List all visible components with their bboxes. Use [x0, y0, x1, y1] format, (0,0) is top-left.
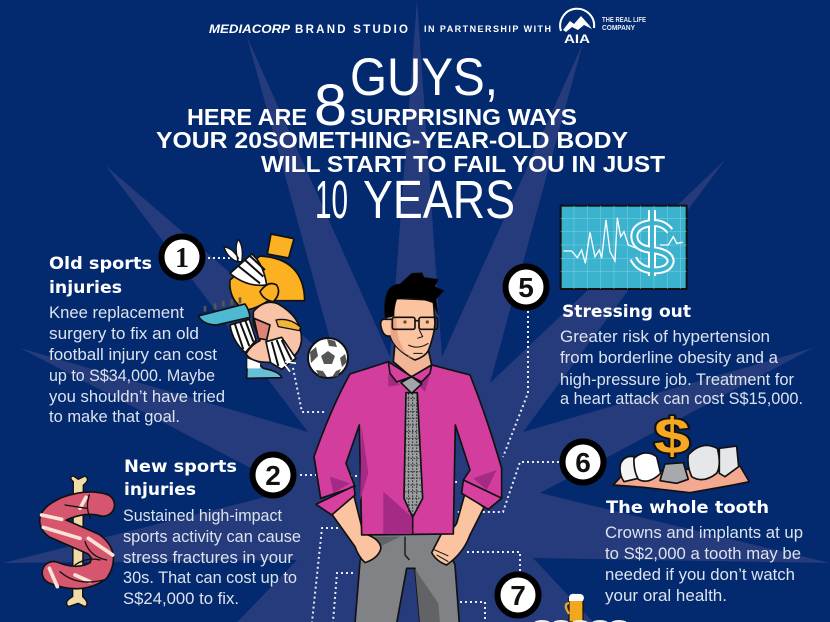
- panel: new sports injuries text: stress fractures in your: [123, 549, 294, 567]
- number badge 5: [506, 266, 546, 308]
- panel: old sports injuries text: Old sports: [49, 254, 152, 274]
- icon: heart monitor with dollar sign: [561, 206, 687, 289]
- icon: teeth with gold dollar: $: [654, 408, 690, 464]
- icon: row of bottle tops: [534, 620, 627, 622]
- number badge 6: [562, 442, 604, 482]
- number badge 2: 2: [265, 460, 281, 491]
- number badge 7: [498, 574, 538, 616]
- header logos: THE REAL LIFE: [602, 17, 646, 24]
- icon: AIA logo: [560, 9, 594, 46]
- title: YEARS: [363, 170, 515, 230]
- panel: stressing out text: Greater risk of hypertension: [560, 328, 770, 346]
- number badge 5: 5: [518, 272, 534, 303]
- header logos: COMPANY: [602, 25, 635, 32]
- panel: the whole tooth text: Crowns and implants at up: [605, 524, 803, 542]
- trousers: [355, 533, 459, 622]
- panel: old sports injuries text: football injury can cost: [49, 346, 217, 364]
- title: 10: [315, 170, 348, 230]
- number badge 1: 1: [175, 243, 189, 274]
- panel: old sports injuries text: injuries: [49, 278, 122, 298]
- panel: the whole tooth text: The whole tooth: [606, 498, 769, 518]
- shirt: [314, 362, 502, 535]
- panel: new sports injuries text: injuries: [124, 480, 196, 500]
- title: GUYS,: [350, 48, 498, 107]
- panel: new sports injuries text: 30s. That can cost up to: [123, 569, 297, 587]
- panel: old sports injuries text: Knee replacement: [49, 304, 184, 322]
- right forearm and hand: [432, 493, 484, 565]
- icon: knee with football boot: [198, 234, 305, 378]
- panel: old sports injuries text: [49, 254, 225, 426]
- panel: new sports injuries text: Sustained high-impact: [123, 507, 282, 525]
- glasses: [392, 317, 415, 329]
- shirt cuffs: [316, 486, 355, 515]
- title: [156, 48, 665, 230]
- number badge 6: 6: [575, 447, 591, 478]
- panel: stressing out text: from borderline obesity and a: [560, 349, 779, 367]
- number badge 7: 7: [510, 580, 526, 611]
- panel: new sports injuries text: S$24,000 to fix.: [123, 590, 239, 608]
- dotted connector lines: [208, 258, 559, 622]
- header logos: MEDIACORP: [209, 24, 290, 36]
- icon: football: [308, 338, 348, 378]
- number badge 2: [252, 454, 294, 496]
- icon: beer mug: [566, 594, 584, 622]
- illustration: man in pink shirt: [314, 273, 502, 622]
- panel: new sports injuries text: [123, 457, 301, 608]
- panel: stressing out text: [560, 302, 803, 408]
- title: YOUR 20SOMETHING-YEAR-OLD BODY: [156, 127, 628, 153]
- panel: stressing out text: high-pressure job. Treatment for: [560, 371, 795, 389]
- panel: the whole tooth text: to S$2,000 a tooth may be: [605, 545, 801, 563]
- panel: new sports injuries text: New sports: [124, 457, 237, 477]
- icon: teeth with gold dollar: [613, 408, 749, 493]
- panel: the whole tooth text: your oral health.: [605, 587, 727, 605]
- panel: old sports injuries text: to make that goal.: [49, 408, 180, 426]
- panel: new sports injuries text: sports activity can cause: [123, 528, 301, 546]
- title: WILL START TO FAIL YOU IN JUST: [261, 151, 665, 177]
- panel: stressing out text: a heart attack can cost S$15,000.: [560, 390, 803, 408]
- tie: [404, 393, 423, 517]
- icon: dollar sign of muscle and bone: [42, 476, 113, 607]
- head: [381, 298, 435, 360]
- header logos: IN PARTNERSHIP WITH: [424, 24, 551, 34]
- panel: old sports injuries text: you shouldn’t have tried: [49, 388, 225, 406]
- icon: AIA logo: AIA: [564, 32, 590, 46]
- panel: the whole tooth text: [605, 498, 803, 605]
- header logos: [209, 9, 646, 46]
- number badge 1: [162, 236, 202, 278]
- panel: old sports injuries text: surgery to fix an old: [49, 325, 199, 343]
- title: HERE ARE: [187, 104, 307, 130]
- panel: stressing out text: Stressing out: [562, 302, 691, 322]
- header logos: BRAND STUDIO: [295, 24, 408, 36]
- left forearm and hand: [332, 493, 381, 563]
- neck: [393, 343, 432, 377]
- shirt collar: [388, 362, 412, 382]
- panel: the whole tooth text: needed if you don’t watch: [605, 566, 795, 584]
- panel: old sports injuries text: up to S$34,000. Maybe: [49, 367, 215, 385]
- title: SURPRISING WAYS: [350, 104, 577, 130]
- title: 8: [314, 73, 347, 138]
